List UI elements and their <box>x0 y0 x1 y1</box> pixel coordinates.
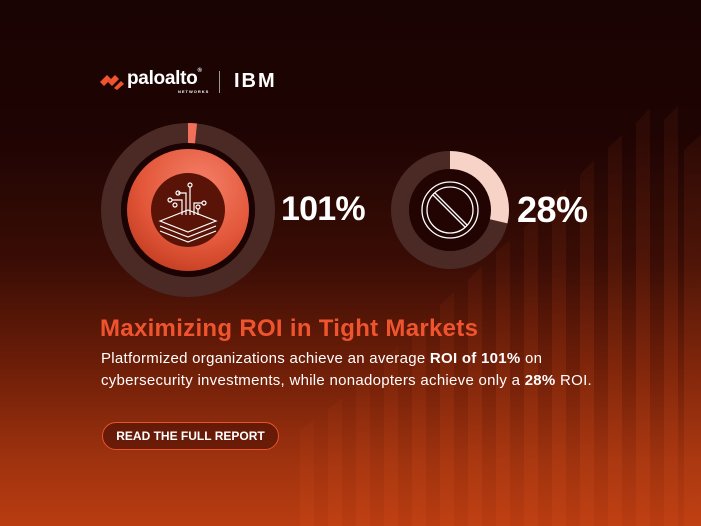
button: read the full report: READ THE FULL REPORT <box>116 429 265 443</box>
stat: 28%: 28% <box>517 189 588 230</box>
body text: Platformized organizations achieve an average ROI of 101% on <box>101 350 542 367</box>
logo text: IBM: IBM <box>234 70 277 92</box>
chart: 28% donut <box>391 151 509 269</box>
heading: Maximizing ROI in Tight Markets <box>100 315 478 342</box>
icon: layers with circuits <box>160 183 216 242</box>
icon: palo alto logo mark <box>100 75 124 90</box>
logo text: paloalto: paloalto® <box>127 68 202 89</box>
button: read the full report <box>102 422 279 450</box>
logos: NETWORKS <box>178 89 209 94</box>
stat: 101%: 101% <box>281 190 365 228</box>
icon: prohibited <box>422 182 478 238</box>
body text: cybersecurity investments, while nonadopters achieve only a 28% ROI. <box>101 372 592 388</box>
chart: 101% donut <box>101 123 275 297</box>
body text <box>101 350 592 388</box>
logos <box>100 68 277 94</box>
